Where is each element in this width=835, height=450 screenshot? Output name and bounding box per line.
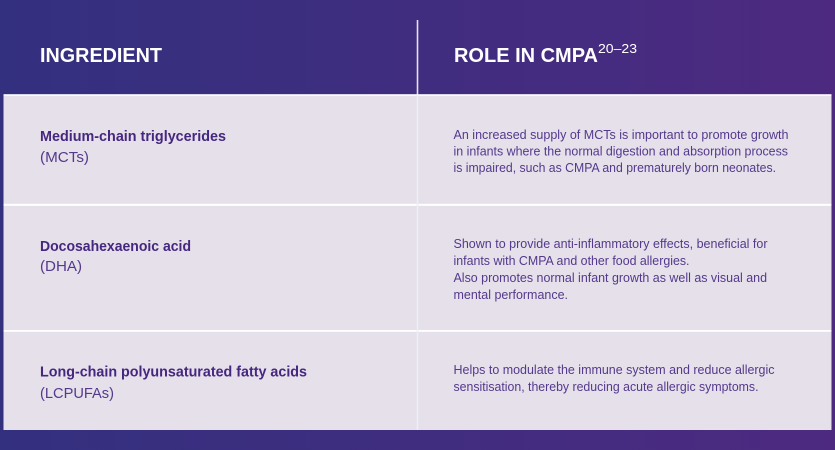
table body panel: [4, 95, 832, 430]
row 1 ingredient: [40, 129, 226, 166]
row 3 role: Helps to modulate the immune system and reduce allergic: [454, 363, 774, 377]
row 1 role: An increased supply of MCTs is important to promote growth: [454, 128, 789, 142]
row 2 ingredient: Docosahexaenoic acid: [40, 239, 191, 255]
row 3 ingredient: Long-chain polyunsaturated fatty acids: [40, 364, 307, 380]
row 1 role: is impaired, such as CMPA and prematurely born neonates.: [454, 161, 776, 175]
row 1 role: [454, 128, 789, 175]
heading: role in CMPA: ROLE IN CMPA: [454, 45, 598, 67]
row 2 ingredient: (DHA): [40, 258, 82, 275]
row 3 ingredient: (LCPUFAs): [40, 385, 114, 402]
row 3 role: sensitisation, thereby reducing acute allergic symptoms.: [454, 380, 758, 394]
row 2 role: infants with CMPA and other food allergies.: [454, 254, 690, 268]
row 1 ingredient: (MCTs): [40, 149, 89, 166]
table grid lines: [4, 94, 832, 430]
row 3 role: [454, 363, 774, 394]
row 2 role: mental performance.: [454, 288, 568, 302]
heading: ingredient: INGREDIENT: [40, 45, 162, 67]
row 2 role: Also promotes normal infant growth as well as visual and: [454, 271, 767, 285]
row 1 role: in infants where the normal digestion and absorption process: [454, 144, 788, 158]
row 3 ingredient: [40, 364, 307, 402]
heading: role in CMPA: [454, 41, 637, 67]
row 1 ingredient: Medium-chain triglycerides: [40, 129, 226, 145]
row 2 role: Shown to provide anti-inflammatory effects, beneficial for: [454, 237, 768, 251]
row 2 role: [454, 237, 768, 302]
header column divider: [417, 20, 418, 95]
heading: role in CMPA: 20–23: [598, 41, 637, 56]
row 2 ingredient: [40, 239, 191, 275]
